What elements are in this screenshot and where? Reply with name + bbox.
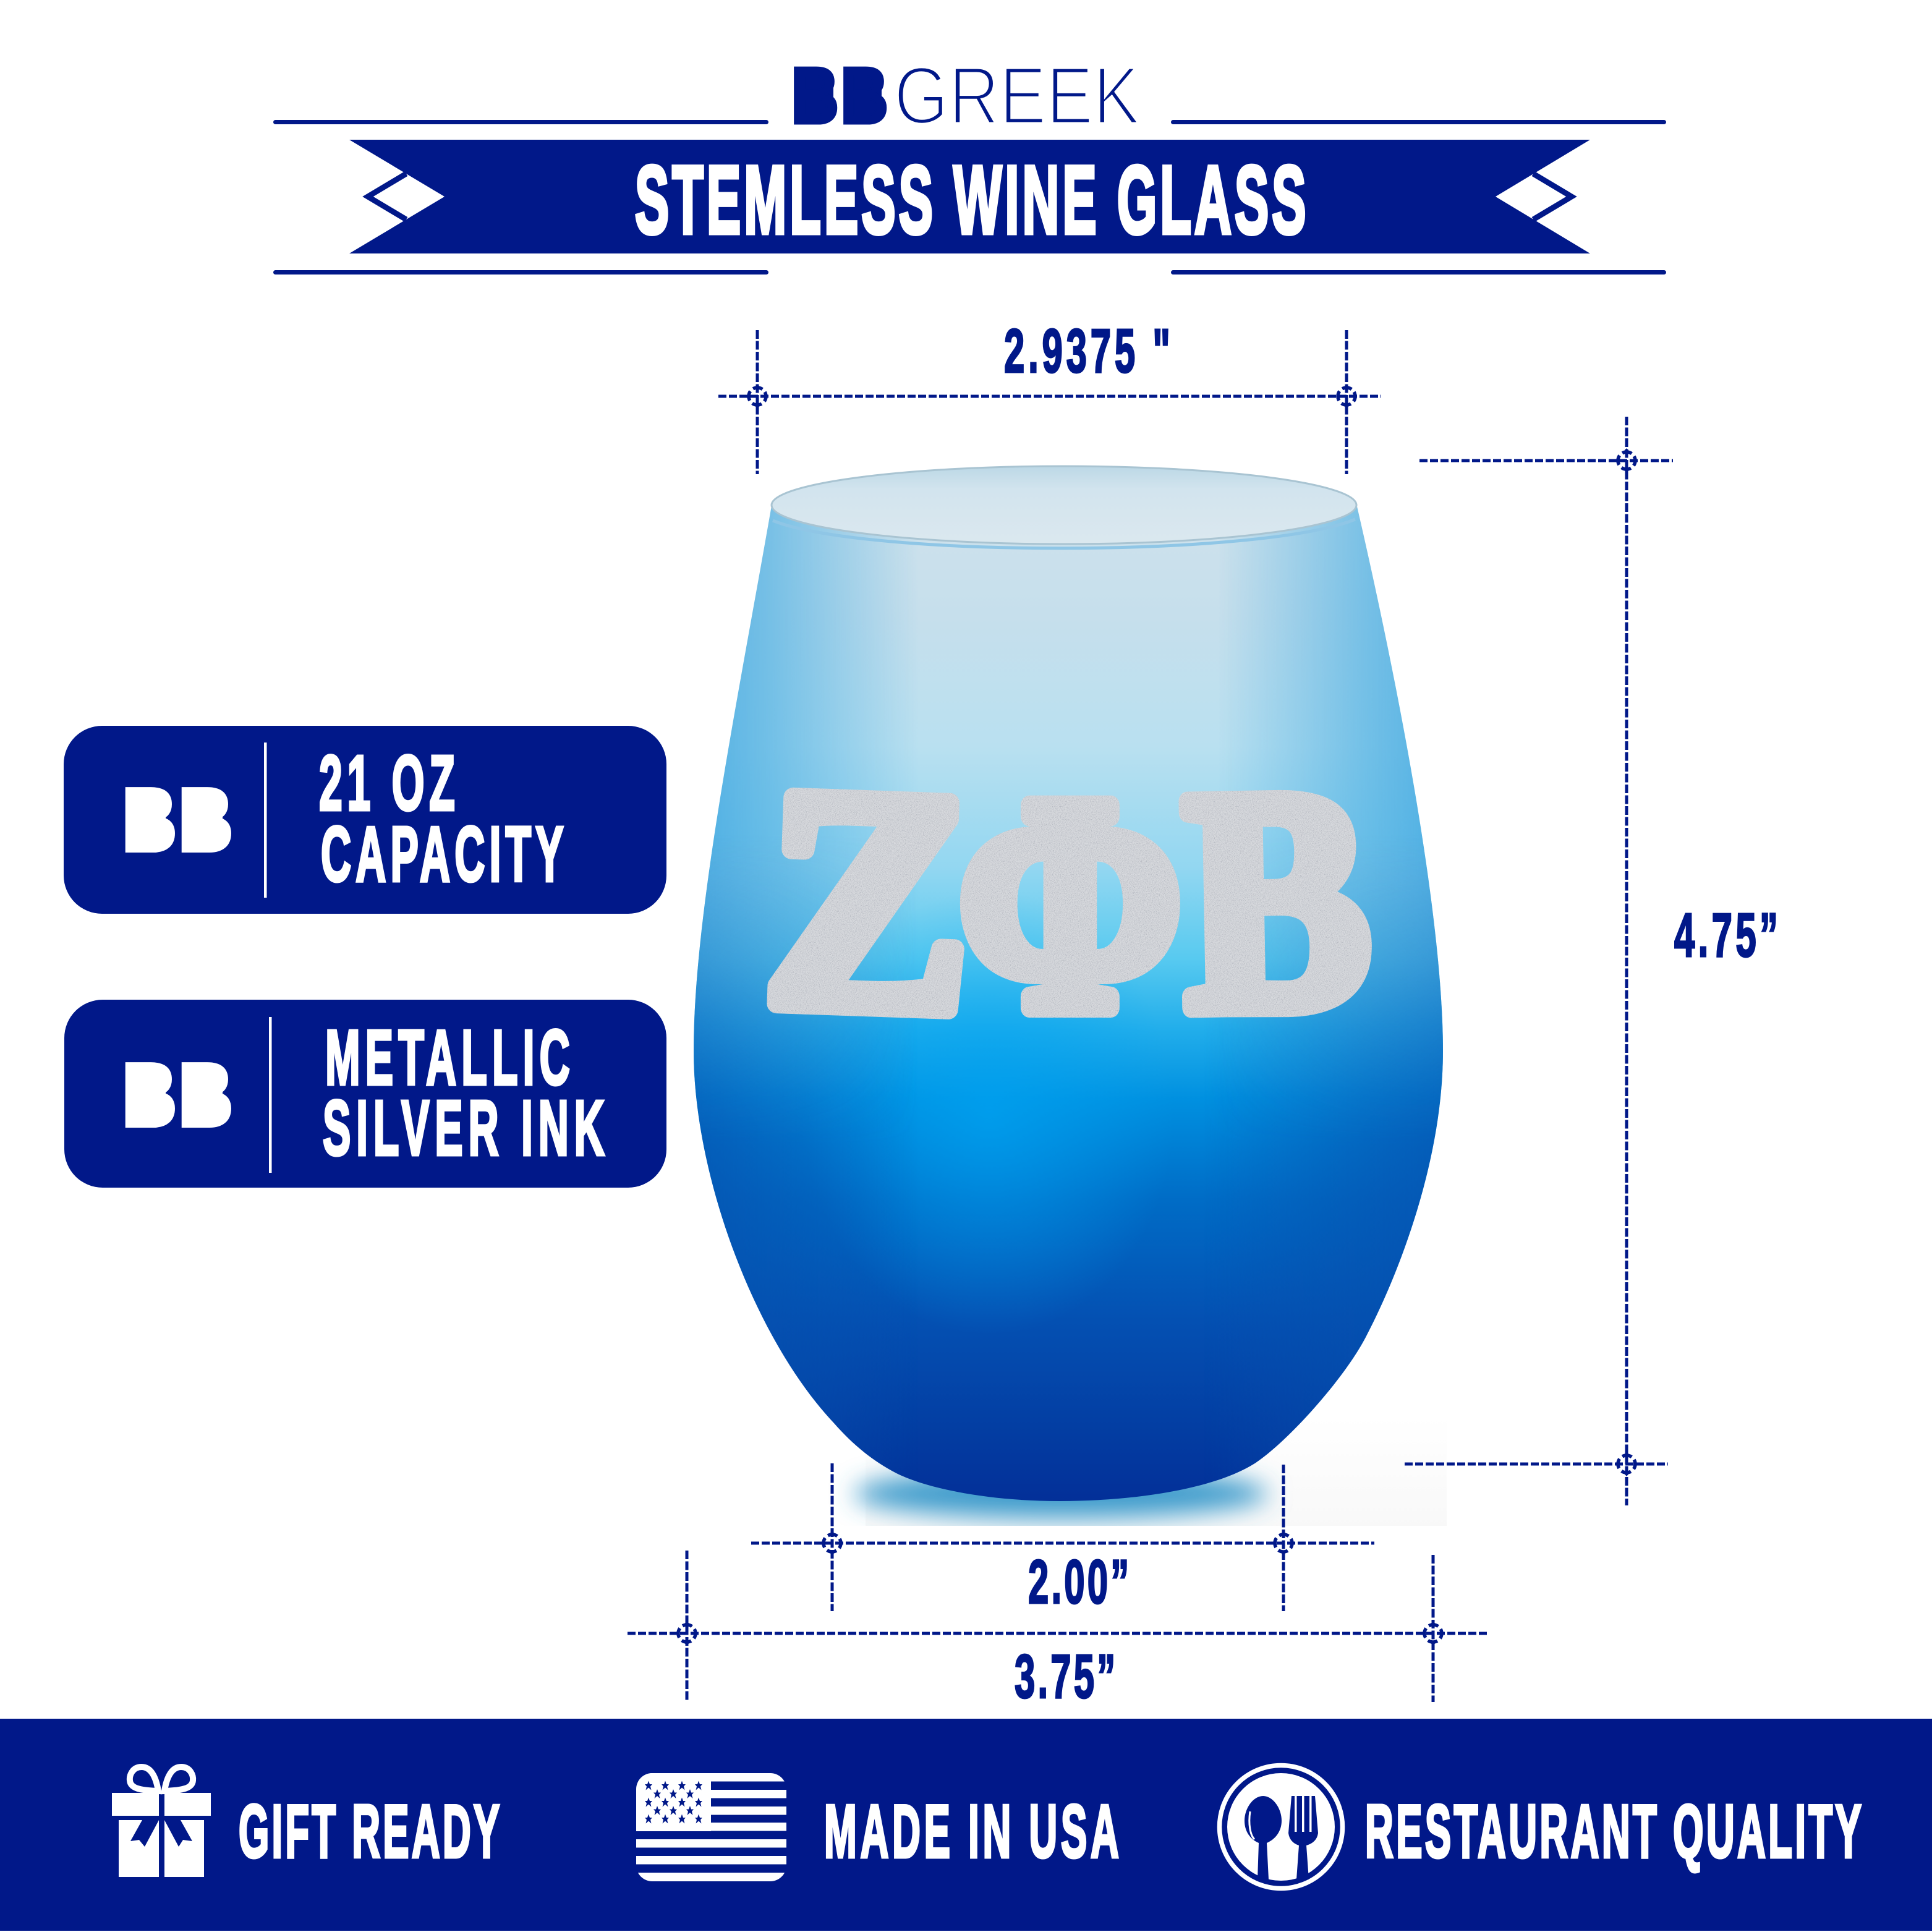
dimension: height 4.75 in: 4.75”: [1674, 901, 1778, 970]
icon: BB mark: BB: [121, 1044, 234, 1146]
product photo: frosted blue glass: [680, 457, 1459, 1509]
floor shadow: [742, 1416, 1459, 1543]
label: 21 oz capacity: CAPACITY: [321, 811, 564, 898]
label: made in usa: MADE IN USA: [824, 1789, 1119, 1873]
dimension: base 2.00 in: [751, 1463, 1374, 1617]
icon: plate with spoon and fork: [1219, 1766, 1343, 1888]
dimension: max width 3.75 in: 3.75”: [1015, 1642, 1115, 1711]
greek letters: ZΦB: B: [1181, 725, 1373, 1076]
label: metallic silver ink: [323, 1015, 605, 1172]
label: 21 oz capacity: 21 OZ: [319, 740, 455, 827]
title text: STEMLESS WINE GLASS: [635, 147, 1306, 254]
label: 21 oz capacity: [319, 740, 564, 898]
label: metallic silver ink: METALLIC: [325, 1015, 570, 1101]
greek letters: ZΦB: [759, 723, 1373, 1079]
dimension: max width 3.75 in: [628, 1551, 1487, 1711]
logo: BB Greek: BB: [790, 50, 889, 141]
dimension: base 2.00 in: 2.00”: [1028, 1547, 1129, 1617]
logo: BB Greek: GREEK: [894, 50, 1140, 141]
icon: gift box: [112, 1767, 211, 1877]
label: restaurant quality: RESTAURANT QUALITY: [1365, 1789, 1862, 1873]
icon: BB mark: BB: [121, 769, 234, 871]
feature card: ink: [64, 1000, 666, 1188]
icon: american flag: [636, 1773, 786, 1881]
logo: BB Greek: [790, 50, 1140, 141]
dimension: top width 2.9375 in: [718, 317, 1381, 474]
dimension: top width 2.9375 in: 2.9375 ": [1004, 317, 1170, 386]
greek letters: ZΦB: Z: [759, 723, 978, 1079]
dimension: height 4.75 in: [1405, 417, 1778, 1505]
label: metallic silver ink: SILVER INK: [323, 1085, 605, 1172]
footer band: [0, 1719, 1932, 1931]
greek letters: ZΦB: Φ: [958, 733, 1182, 1075]
label: gift ready: GIFT READY: [239, 1789, 500, 1873]
header rules: [273, 120, 1666, 274]
title ribbon: [349, 140, 1590, 254]
glass rim: [772, 466, 1356, 548]
feature card: capacity: [64, 726, 666, 914]
